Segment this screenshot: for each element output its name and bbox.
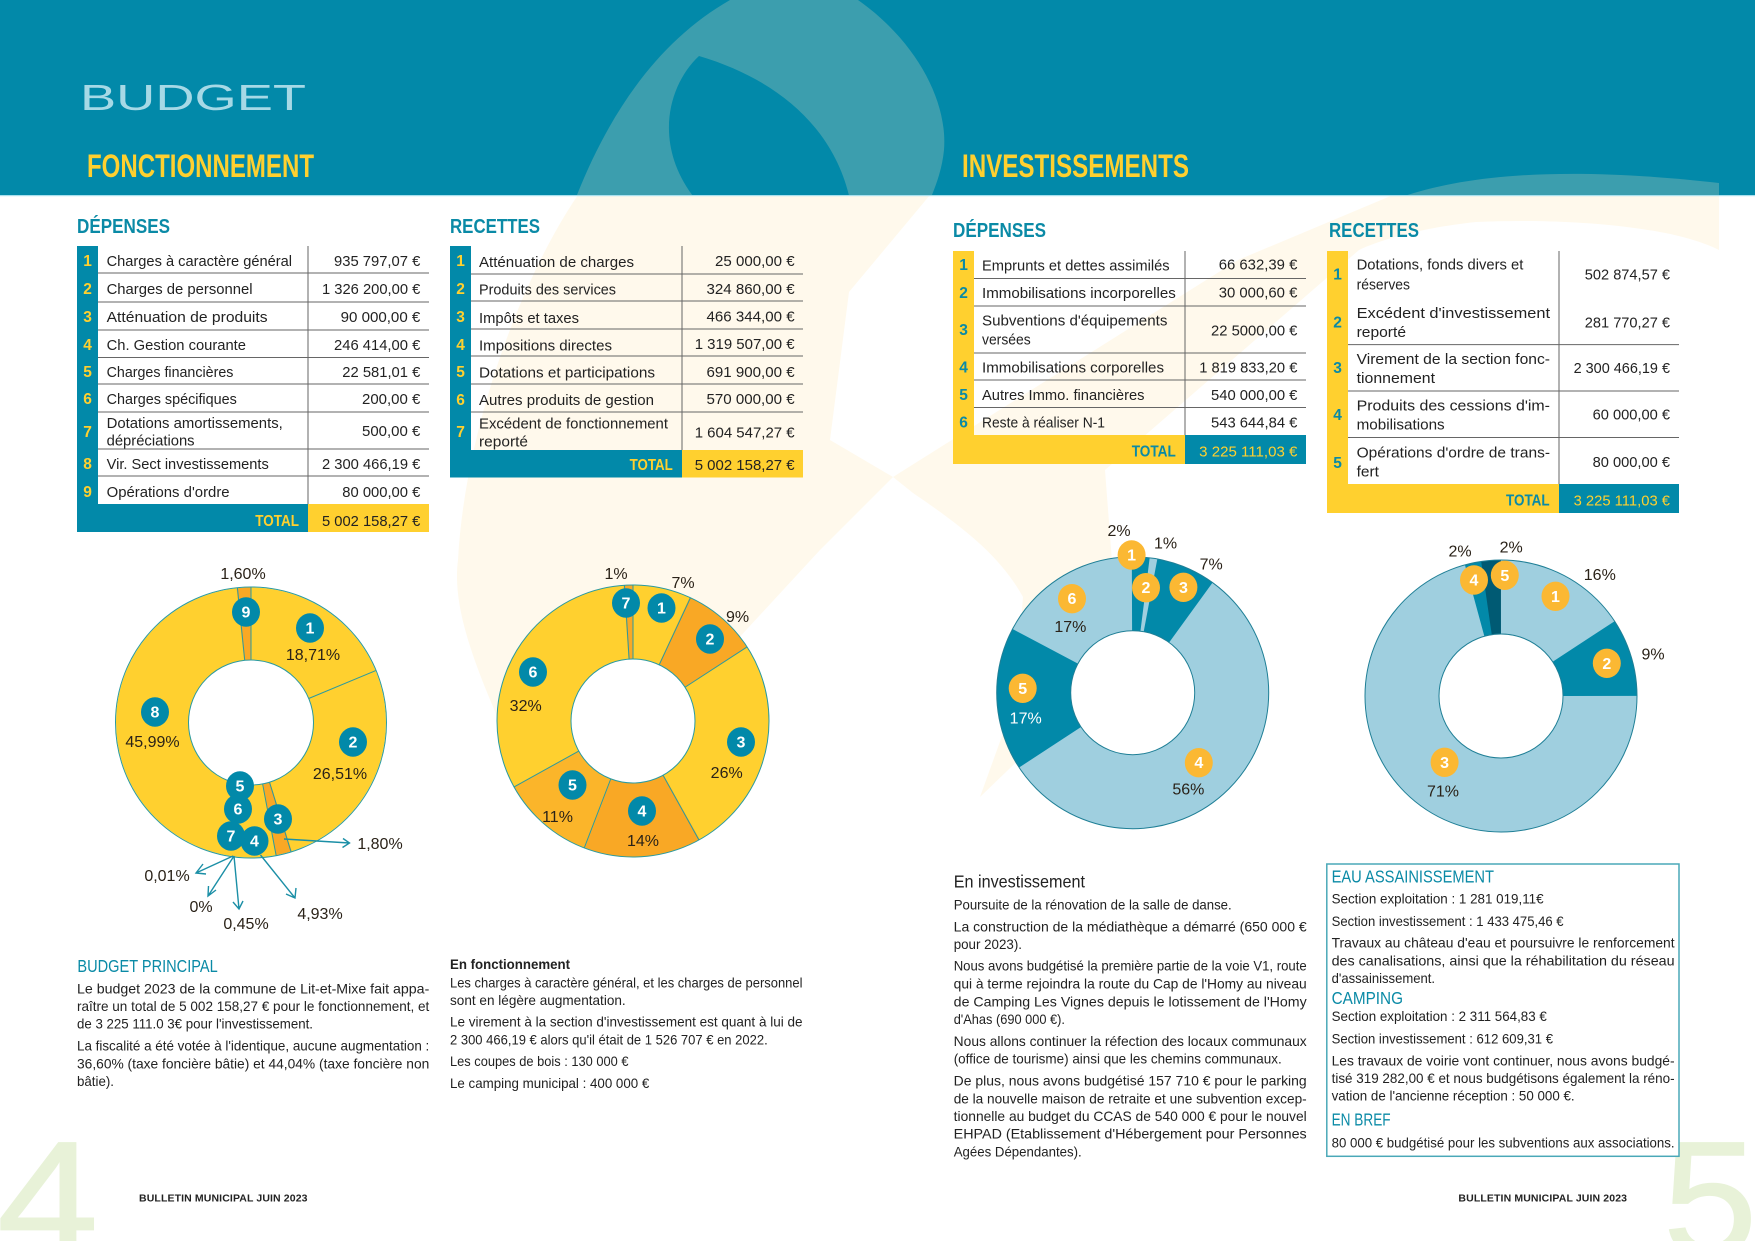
panel: eau assainissement, camping, en bref: Section investissement : 1 433 475,46 € (1332, 914, 1564, 929)
percent labels: 26,51% (313, 766, 367, 783)
table: dépenses fonctionnement: 5 (83, 364, 92, 381)
table: recettes fonctionnement: Impôts et taxes (479, 310, 579, 327)
text block: en fonctionnement (450, 957, 802, 1091)
number badges: 7 (227, 828, 236, 846)
table: recettes investissements: réserves (1357, 276, 1410, 293)
percent labels: 26% (711, 765, 743, 782)
percent labels: 2% (1500, 540, 1523, 557)
table: recettes fonctionnement: 4 (456, 337, 465, 354)
number badges: 3 (1179, 580, 1188, 597)
table: recettes fonctionnement: 3 (456, 309, 465, 326)
percent labels: 2% (1448, 544, 1472, 561)
text block: en investissement: pour 2023). (954, 937, 1022, 952)
percent labels (510, 566, 749, 850)
donut chart: dépenses investissements (996, 523, 1270, 830)
text block: en investissement: Nous avons budgétisé la première partie de la voie V1, route (954, 959, 1307, 974)
table: recettes investissements (1327, 251, 1679, 513)
table: recettes fonctionnement: Dotations et participations (479, 364, 655, 382)
number badges: 2 (349, 734, 358, 752)
table: recettes fonctionnement: 6 (456, 392, 465, 409)
percent labels: 18,71% (286, 647, 340, 664)
donut chart: recettes investissements (1364, 540, 1665, 833)
table: dépenses investissements: Emprunts et dettes assimilés (982, 257, 1170, 274)
table: recettes fonctionnement: 2 (456, 281, 465, 298)
table: dépenses fonctionnement: 1 (83, 253, 92, 270)
table: dépenses investissements (953, 251, 1306, 464)
percent labels: 56% (1172, 782, 1204, 799)
number badges (141, 597, 367, 856)
table: dépenses fonctionnement: 90 000,00 € (341, 309, 421, 326)
table: recettes fonctionnement: 570 000,00 € (706, 391, 795, 408)
percent labels: 0,45% (223, 916, 269, 933)
heading: recettes investissements: RECETTES (1329, 220, 1419, 242)
table: recettes fonctionnement: 5 (456, 364, 465, 381)
table: dépenses investissements: 22 5000,00 € (1211, 323, 1298, 340)
donut chart: recettes fonctionnement (497, 566, 769, 857)
table: dépenses fonctionnement: Dotations amortissements, (107, 415, 283, 432)
table: dépenses investissements: Autres Immo. financières (982, 387, 1144, 404)
panel: eau assainissement, camping, en bref: Travaux au château d'eau et poursuivre le renforcement (1332, 936, 1675, 951)
number badges: 2 (706, 632, 715, 648)
text block: budget principal: La fiscalité a été votée à l'identique, aucune augmentation : (77, 1038, 429, 1053)
table: recettes investissements: 281 770,27 € (1585, 314, 1671, 332)
table: dépenses investissements: 66 632,39 € (1219, 257, 1298, 274)
percent labels: 17% (1054, 619, 1086, 636)
text block: en investissement (954, 872, 1307, 1159)
text block: en investissement: La construction de la médiathèque a démarré (650 000 € (954, 920, 1307, 935)
table: dépenses fonctionnement: Charges spécifiques (107, 391, 237, 408)
number badges (1431, 561, 1621, 777)
table: dépenses investissements: Subventions d'équipements (982, 312, 1167, 329)
table: dépenses investissements: 3 (959, 322, 968, 339)
total row: 5 002 158,27 € (695, 457, 795, 474)
text block: en investissement: En investissement (954, 872, 1085, 892)
percent labels: 2% (1107, 523, 1131, 540)
table: dépenses investissements: 5 (959, 387, 968, 404)
text block: budget principal: bâtie). (77, 1074, 114, 1089)
callout arrows (196, 838, 350, 909)
heading: investissements: INVESTISSEMENTS (962, 148, 1189, 184)
table: dépenses fonctionnement: 3 (83, 309, 92, 326)
panel: eau assainissement, camping, en bref: Section investissement : 612 609,31 € (1332, 1031, 1553, 1046)
number badges: 6 (234, 802, 243, 818)
table: recettes investissements: 1 (1333, 267, 1342, 284)
total row: TOTAL (255, 513, 299, 530)
number badges: 1 (1127, 548, 1136, 564)
table: dépenses fonctionnement: Atténuation de produits (107, 309, 268, 326)
percent labels: 32% (510, 698, 542, 715)
table: dépenses fonctionnement: Vir. Sect investissements (107, 456, 269, 473)
table: recettes investissements: reporté (1357, 324, 1406, 341)
text block: en fonctionnement: Le camping municipal : 400 000 € (450, 1076, 650, 1091)
table: dépenses fonctionnement: 7 (83, 424, 92, 441)
header band (0, 0, 1755, 200)
slices (1364, 559, 1638, 833)
text block: en investissement: tionnelle au budget du CCAS de 540 000 € pour le nouvel (954, 1109, 1307, 1124)
table: recettes investissements: 2 (1333, 314, 1342, 332)
number badges: 4 (1194, 755, 1203, 772)
text block: en fonctionnement: Le virement à la section d'investissement est quant à lui de (450, 1015, 802, 1030)
number badges: 7 (622, 596, 631, 612)
table: dépenses fonctionnement: 1 326 200,00 € (322, 281, 421, 298)
percent labels (125, 566, 403, 933)
table: dépenses fonctionnement: 246 414,00 € (334, 337, 421, 354)
panel: eau assainissement, camping, en bref: Section exploitation : 2 311 564,83 € (1332, 1009, 1547, 1024)
text block: en fonctionnement: Les charges à caractère général, et les charges de personnel (450, 975, 802, 990)
table: dépenses investissements: Immobilisations corporelles (982, 360, 1164, 376)
table: recettes fonctionnement: 1 (456, 253, 465, 270)
number badges: 3 (737, 734, 746, 752)
text block: en investissement: qui à terme rejoindra la route du Cap de l'Homy au niveau (954, 977, 1307, 992)
table: recettes fonctionnement: Produits des services (479, 281, 616, 298)
percent labels: 7% (1200, 556, 1223, 573)
panel: eau assainissement, camping, en bref: d'assainissement. (1332, 971, 1435, 986)
table: recettes fonctionnement: Atténuation de charges (479, 254, 634, 271)
total row: 5 002 158,27 € (322, 513, 421, 530)
panel: eau assainissement, camping, en bref (1327, 864, 1679, 1156)
total row (77, 504, 429, 532)
number badges: 3 (274, 812, 283, 828)
table: recettes fonctionnement: 25 000,00 € (715, 253, 795, 270)
panel: eau assainissement, camping, en bref: EN BREF (1332, 1110, 1391, 1130)
table: recettes fonctionnement: Autres produits de gestion (479, 392, 654, 409)
table: dépenses investissements: 1 819 833,20 € (1199, 360, 1298, 376)
text block: budget principal: BUDGET PRINCIPAL (77, 956, 218, 976)
table: dépenses fonctionnement: 2 (83, 281, 92, 298)
number badges: 9 (242, 604, 251, 622)
number badges: 5 (1500, 568, 1509, 585)
number badges: 3 (1440, 755, 1449, 772)
text block: en investissement: de la nouvelle maison de retraite et une subvention excep- (954, 1091, 1307, 1106)
table: dépenses investissements: 540 000,00 € (1211, 387, 1298, 404)
text block: en investissement: EHPAD (Etablissement d'Hébergement pour Personnes (954, 1127, 1307, 1142)
percent labels: 1% (1154, 535, 1177, 552)
table: dépenses investissements: Immobilisations incorporelles (982, 285, 1176, 302)
text block: en fonctionnement: En fonctionnement (450, 957, 570, 972)
percent labels: 16% (1584, 567, 1616, 584)
table: dépenses fonctionnement: Charges financières (107, 364, 233, 381)
table: recettes investissements: 4 (1333, 407, 1342, 424)
table: dépenses fonctionnement: 9 (83, 484, 92, 501)
table: recettes investissements: Excédent d'investissement (1357, 305, 1551, 322)
text block: budget principal: Le budget 2023 de la commune de Lit-et-Mixe fait appa- (77, 981, 429, 996)
table: dépenses fonctionnement: 500,00 € (362, 423, 421, 440)
percent labels: 4,93% (297, 906, 343, 923)
table: dépenses fonctionnement: 4 (83, 337, 92, 354)
panel: eau assainissement, camping, en bref: vation de l'ancienne réception : 50 000 €. (1332, 1089, 1575, 1104)
number badges (1009, 540, 1213, 777)
text block: en investissement: Nous allons continuer la réfection des locaux communaux (954, 1034, 1307, 1049)
number badges: 2 (1602, 656, 1611, 673)
number badges: 5 (568, 778, 577, 794)
total row (953, 435, 1306, 464)
text block: budget principal (77, 956, 430, 1089)
table: dépenses fonctionnement: Ch. Gestion courante (107, 337, 246, 354)
text block: en investissement: (office de tourisme) ainsi que les chemins communaux. (954, 1052, 1282, 1067)
table: dépenses fonctionnement: Charges à caractère général (107, 253, 292, 270)
table: dépenses fonctionnement: 6 (83, 391, 92, 408)
table: dépenses fonctionnement: 22 581,01 € (342, 364, 421, 381)
table: dépenses fonctionnement: Opérations d'ordre (107, 484, 230, 501)
table: recettes investissements: mobilisations (1357, 417, 1445, 434)
table: recettes fonctionnement: 691 900,00 € (706, 364, 795, 381)
slices (497, 585, 769, 857)
percent labels: 0,01% (144, 868, 190, 885)
total row: 3 225 111,03 € (1574, 492, 1671, 509)
footer left: BULLETIN MUNICIPAL JUIN 2023 (139, 1193, 308, 1205)
number badges: 1 (1551, 589, 1560, 606)
table: dépenses investissements: versées (982, 332, 1031, 349)
number badges: 2 (1142, 580, 1151, 597)
table: recettes investissements: Virement de la section fonc- (1357, 351, 1550, 368)
number badges: 4 (250, 834, 259, 850)
slices (116, 587, 386, 858)
table: recettes fonctionnement: 324 860,00 € (706, 281, 795, 298)
text block: en investissement: Poursuite de la rénovation de la salle de danse. (954, 897, 1232, 912)
total row: 3 225 111,03 € (1199, 443, 1298, 460)
table: dépenses fonctionnement (77, 246, 429, 532)
total row: TOTAL (1506, 492, 1550, 509)
text block: budget principal: 36,60% (taxe foncière bâtie) et 44,04% (taxe foncière non (77, 1056, 429, 1071)
table: recettes investissements: 2 300 466,19 € (1574, 360, 1671, 377)
table: recettes investissements: Produits des cessions d'im- (1357, 397, 1550, 414)
number badges: 6 (529, 664, 538, 682)
text block: en fonctionnement: Les coupes de bois : 130 000 € (450, 1054, 629, 1069)
table: dépenses fonctionnement: 200,00 € (362, 391, 421, 408)
percent labels: 1% (604, 566, 628, 583)
donut chart: dépenses fonctionnement (116, 566, 403, 933)
slices (996, 556, 1270, 830)
table: dépenses fonctionnement: 80 000,00 € (342, 484, 421, 501)
heading: recettes fonctionnement: RECETTES (450, 216, 540, 238)
panel: eau assainissement, camping, en bref: Section exploitation : 1 281 019,11€ (1332, 892, 1544, 907)
table: recettes investissements: 3 (1333, 360, 1342, 377)
total row: TOTAL (1132, 443, 1176, 460)
table: dépenses fonctionnement: dépréciations (107, 432, 195, 450)
table: recettes investissements: 5 (1333, 455, 1342, 472)
table: recettes fonctionnement: 1 604 547,27 € (695, 424, 795, 442)
text block: budget principal: de 3 225 111.0 3€ pour l'investissement. (77, 1016, 313, 1031)
number badges (519, 588, 755, 826)
panel: eau assainissement, camping, en bref: 80 000 € budgétisé pour les subventions aux associations. (1332, 1135, 1675, 1150)
total row: TOTAL (630, 457, 673, 474)
number badges: 8 (151, 704, 160, 722)
table: dépenses investissements: 2 (959, 285, 968, 302)
heading: dépenses investissements: DÉPENSES (953, 219, 1046, 242)
percent labels: 7% (671, 575, 695, 592)
number badges: 1 (306, 620, 315, 638)
number badges: 4 (638, 804, 647, 820)
table: recettes investissements: 80 000,00 € (1593, 454, 1671, 471)
table: dépenses investissements: 6 (959, 414, 968, 432)
panel: eau assainissement, camping, en bref: CAMPING (1332, 988, 1403, 1008)
table: recettes investissements: tionnement (1357, 370, 1436, 387)
table: recettes fonctionnement: Excédent de fonctionnement (479, 416, 669, 433)
panel: eau assainissement, camping, en bref: Les travaux de voirie vont continuer, nous avons budgé- (1332, 1053, 1675, 1068)
total row (1327, 484, 1679, 513)
text block: en investissement: De plus, nous avons budgétisé 157 710 € pour le parking (954, 1073, 1307, 1088)
number badges: 4 (1470, 572, 1479, 590)
table: recettes investissements: 502 874,57 € (1585, 266, 1671, 283)
percent labels (1010, 523, 1223, 799)
table: dépenses investissements: 1 (959, 257, 968, 274)
table: dépenses fonctionnement: 8 (83, 456, 92, 473)
table: recettes fonctionnement: 1 319 507,00 € (695, 336, 795, 353)
percent labels: 9% (1641, 646, 1665, 663)
table: recettes investissements: 60 000,00 € (1593, 407, 1671, 424)
text block: en fonctionnement: sont en légère augmentation. (450, 993, 626, 1008)
table: dépenses fonctionnement: Charges de personnel (107, 281, 253, 298)
number badges: 6 (1068, 591, 1077, 608)
table: recettes fonctionnement: reporté (479, 433, 528, 450)
table: dépenses investissements: 30 000,60 € (1219, 284, 1298, 302)
percent labels: 14% (627, 833, 659, 850)
percent labels (1427, 540, 1665, 800)
percent labels: 17% (1010, 710, 1042, 727)
percent labels: 11% (542, 809, 573, 826)
table: recettes fonctionnement: 7 (456, 424, 465, 441)
number badges: 5 (1018, 681, 1027, 698)
table: dépenses investissements: 4 (959, 360, 968, 376)
background watermark (457, 195, 1719, 797)
percent labels: 45,99% (125, 734, 180, 751)
percent labels: 0% (189, 899, 213, 916)
text block: en investissement: de Camping Les Vignes depuis le lotissement de l'Homy (954, 994, 1307, 1009)
percent labels: 9% (726, 609, 749, 626)
text block: en fonctionnement: 2 300 466,19 € alors qu'il était de 1 526 707 € en 2022. (450, 1032, 768, 1047)
number badges: 1 (657, 600, 666, 618)
table: dépenses fonctionnement: 2 300 466,19 € (322, 456, 421, 473)
percent labels: 1,80% (357, 836, 403, 853)
percent labels: 71% (1427, 783, 1459, 800)
heading: dépenses fonctionnement: DÉPENSES (77, 215, 170, 238)
table: dépenses investissements: Reste à réaliser N-1 (982, 414, 1105, 432)
table: recettes fonctionnement: 466 344,00 € (706, 308, 795, 325)
table: recettes investissements: Opérations d'ordre de trans- (1357, 444, 1550, 462)
table: recettes fonctionnement: Impositions directes (479, 337, 612, 354)
table: dépenses fonctionnement: 935 797,07 € (334, 253, 421, 270)
panel: eau assainissement, camping, en bref: EAU ASSAINISSEMENT (1332, 866, 1494, 886)
table: dépenses investissements: 543 644,84 € (1211, 414, 1298, 432)
table: recettes fonctionnement (450, 246, 803, 478)
text block: budget principal: raître un total de 5 002 158,27 € pour le fonctionnement, et (77, 999, 430, 1014)
title: budget: BUDGET (80, 77, 306, 118)
heading: fonctionnement: FONCTIONNEMENT (87, 148, 314, 184)
percent labels: 1,60% (220, 566, 266, 583)
table: recettes investissements: fert (1357, 463, 1380, 480)
table: recettes investissements: Dotations, fonds divers et (1357, 257, 1524, 274)
panel: eau assainissement, camping, en bref: des canalisations, ainsi que la réhabilitation du réseau (1332, 953, 1675, 968)
panel: eau assainissement, camping, en bref: tisé 319 282,00 € et nous budgétisons également la réno- (1332, 1071, 1675, 1086)
footer right: BULLETIN MUNICIPAL JUIN 2023 (1458, 1193, 1627, 1205)
total row (450, 450, 803, 478)
number badges: 5 (236, 778, 245, 796)
text block: en investissement: Agées Dépendantes). (954, 1144, 1082, 1159)
text block: en investissement: d'Ahas (690 000 €). (954, 1012, 1065, 1027)
